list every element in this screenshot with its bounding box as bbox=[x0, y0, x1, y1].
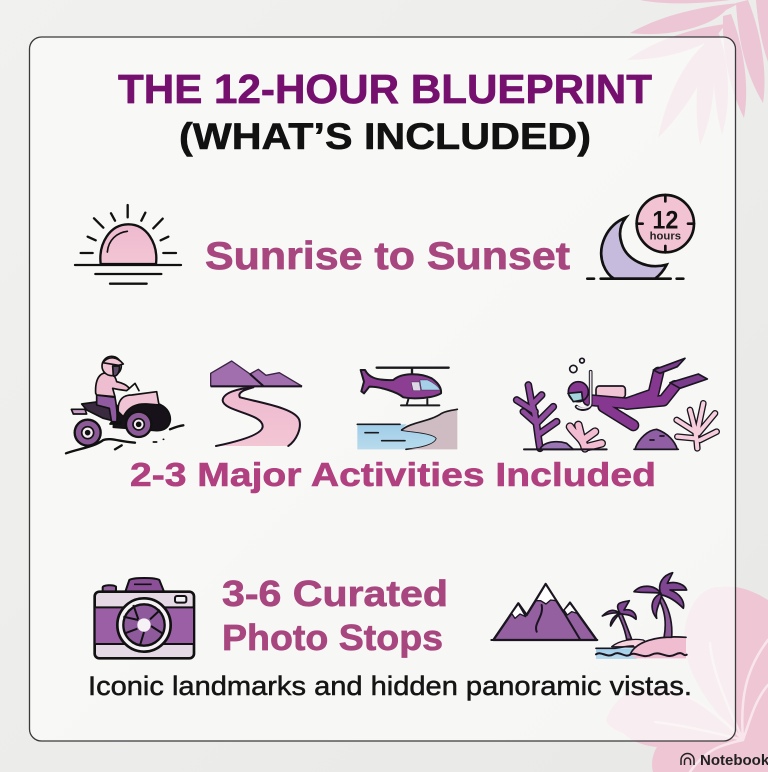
palm frond decoration bbox=[627, 0, 768, 145]
icon: camera bbox=[95, 578, 194, 658]
icon: sunrise bbox=[75, 205, 181, 284]
icon: helicopter over coast bbox=[357, 368, 457, 449]
rock bbox=[635, 429, 677, 449]
left coral bbox=[517, 385, 557, 448]
hibiscus flower decoration bbox=[606, 587, 768, 772]
right coral bbox=[677, 403, 717, 448]
tank bbox=[596, 386, 625, 398]
icon: mountains bbox=[491, 584, 597, 640]
icon: moon and 12 hours clock bbox=[587, 195, 694, 279]
pink coral bbox=[570, 425, 602, 448]
icon: moon and 12 hours clock: 12 bbox=[652, 208, 678, 235]
icon: winding road and mountains bbox=[211, 361, 302, 446]
heading: 3-6 Curated Photo Stops: 3-6 Curated bbox=[222, 573, 448, 614]
title bbox=[118, 66, 652, 157]
icon: moon and 12 hours clock: hours bbox=[650, 231, 681, 243]
title: (WHAT’S INCLUDED) bbox=[179, 116, 591, 157]
watermark: Notebook: Notebook bbox=[700, 752, 768, 769]
heading: 3-6 Curated Photo Stops: Photo Stops bbox=[222, 617, 443, 658]
heading: Sunrise to Sunset: Sunrise to Sunset bbox=[205, 235, 570, 278]
title: THE 12-HOUR BLUEPRINT bbox=[118, 66, 652, 112]
icon: palm island bbox=[596, 573, 687, 659]
icon: scuba diver and coral bbox=[517, 358, 717, 449]
icon: ATV rider bbox=[66, 356, 183, 453]
diver limbs outline bbox=[588, 373, 675, 425]
heading: 3-6 Curated Photo Stops bbox=[222, 573, 448, 658]
heading: 2-3 Major Activities Included: 2-3 Major Activities Included bbox=[130, 456, 656, 493]
caption: Iconic landmarks and hidden panoramic vistas. bbox=[88, 671, 692, 701]
